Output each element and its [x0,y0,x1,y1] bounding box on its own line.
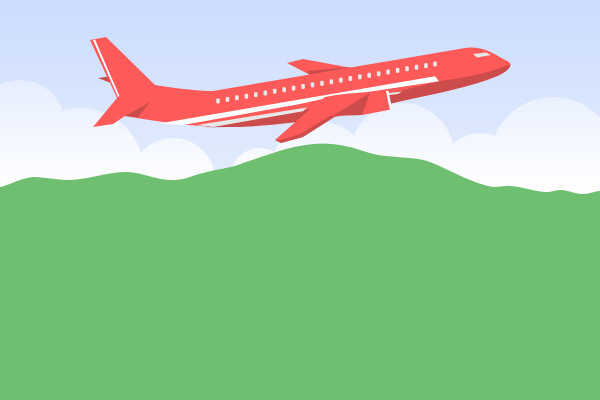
tail fin [90,37,157,100]
body stripe: white [160,76,439,125]
stripe fragment ahead of wing [388,92,402,95]
green hills [0,144,600,400]
far tail stabilizer [98,76,116,85]
near wing [275,91,392,143]
cockpit window [473,52,491,58]
sky background [0,0,600,200]
flap edge [386,91,392,110]
body stripe: grey [197,108,307,127]
clouds [0,80,600,236]
far wing [287,59,352,75]
airplane [90,37,510,143]
tail stabilizer [93,88,157,127]
windows row [216,62,437,104]
fuselage [125,48,510,127]
belly shadow [205,64,510,127]
